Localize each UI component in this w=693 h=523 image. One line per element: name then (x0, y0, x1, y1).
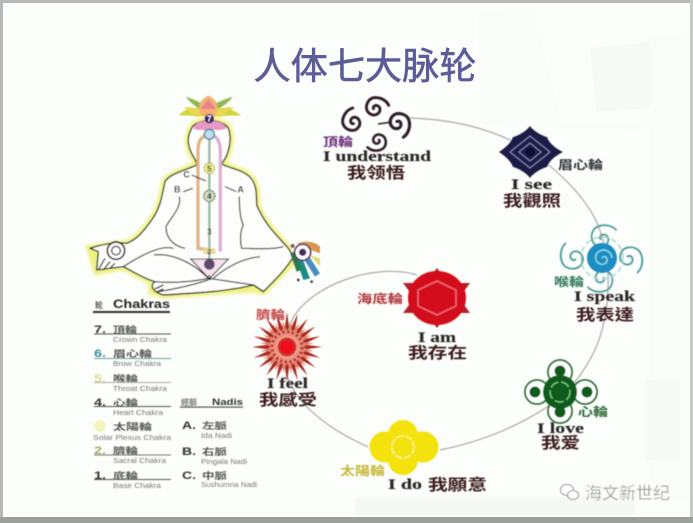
sacral affirmation (259, 376, 317, 409)
icon: root star (403, 268, 470, 328)
sacral chakra group (252, 307, 322, 409)
legend row 5 (94, 373, 171, 393)
root affirmation: I am (418, 330, 457, 346)
figure: channel letters: C (183, 169, 190, 179)
icon: sacral sunburst (252, 312, 322, 382)
nadi B: Pingala Nadi (201, 457, 247, 466)
legend row 3 (93, 420, 172, 442)
nadi C: 中脈 (202, 470, 227, 481)
figure: channels (198, 120, 220, 272)
throat label: 喉輪 (554, 274, 584, 289)
connecting spiral path (284, 118, 608, 450)
legend row 4 (94, 397, 171, 417)
figure: chakra points 7 6 5 4 3 2: 5 (207, 164, 212, 173)
crown affirmation: I understand (323, 149, 432, 165)
nadi C: C. (182, 470, 196, 482)
figure: base triangle: 1 (207, 273, 211, 282)
root affirmation (408, 330, 467, 362)
legend row 1: Base Chakra (113, 481, 162, 490)
figure: base triangle (191, 259, 228, 282)
throat chakra group (554, 225, 642, 324)
third eye affirmation: 我觀照 (503, 192, 561, 210)
crown chakra group (323, 95, 432, 182)
throat affirmation: 我表達 (576, 306, 635, 324)
icon: solar flower (370, 420, 438, 475)
legend row 4: 4. (94, 397, 106, 409)
figure: right hand with colored fingers (290, 242, 320, 283)
legend row 6: Brow Chakra (113, 359, 162, 368)
root label: 海底輪 (357, 291, 403, 306)
legend row 5: Throat Chakra (113, 384, 168, 393)
figure: chakra points 7 6 5 4 3 2: 2 (207, 247, 211, 256)
nadi C (182, 470, 257, 489)
legend row 6 (94, 348, 171, 368)
legend row 1: 1. (94, 470, 106, 482)
nadi A: 左脈 (202, 420, 227, 431)
legend row 2 (94, 445, 171, 465)
heart affirmation: 我爱 (541, 434, 580, 452)
legend row 7: 7. (94, 324, 106, 336)
figure: left hand mudra (98, 242, 125, 270)
throat affirmation: I speak (574, 289, 636, 305)
legend row 4: Heart Chakra (113, 408, 164, 417)
sacral label: 臍輪 (256, 307, 285, 322)
heart chakra group (525, 360, 608, 452)
third eye chakra group (499, 126, 603, 210)
nadis heading: 經脈 (181, 397, 197, 407)
watermark: 海文新世纪 (585, 479, 670, 504)
solar plexus chakra group (340, 420, 487, 494)
crown label: 頂輪 (323, 134, 353, 149)
legend heading (93, 299, 170, 313)
third eye affirmation (503, 177, 561, 210)
legend heading: 轮 (95, 300, 103, 310)
crown affirmation (323, 149, 432, 182)
crown affirmation: 我领悟 (347, 164, 406, 182)
solar affirmation: 我願意 (428, 475, 487, 494)
figure: chakra points 7 6 5 4 3 2: 4 (207, 192, 212, 201)
legend row 2: 2. (94, 445, 106, 457)
legend: chakras (93, 299, 172, 490)
icon: crown swirls (339, 95, 411, 151)
throat affirmation (574, 289, 636, 324)
figure: chakra points 7 6 5 4 3 2: 7 (207, 115, 212, 124)
legend row 1 (94, 470, 171, 490)
icon: throat swirls (561, 225, 642, 292)
figure: chakra points 7 6 5 4 3 2: 3 (207, 227, 212, 236)
heart affirmation: I love (537, 421, 584, 437)
third eye label: 眉心輪 (558, 157, 603, 172)
nadis heading (180, 397, 243, 408)
nadi A: A. (182, 420, 196, 432)
nadi B (182, 446, 247, 466)
figure: foot detail (155, 285, 263, 292)
heart affirmation (537, 421, 584, 452)
legend: nadis (180, 397, 257, 489)
heart label: 心輪 (578, 404, 608, 419)
legend row 1: 底輪 (113, 470, 138, 481)
legend heading: Chakras (113, 299, 170, 311)
legend row 6: 眉心輪 (113, 348, 152, 359)
figure: yellow aura (90, 121, 293, 295)
legend row 6: 6. (94, 348, 106, 360)
figure: crown lotus (179, 96, 241, 132)
sacral affirmation: 我感受 (259, 390, 317, 409)
third eye affirmation: I see (511, 177, 552, 193)
meditating figure (90, 96, 320, 295)
icon: third eye star (499, 126, 563, 178)
legend row 7: 頂輪 (113, 324, 137, 335)
root chakra group (357, 268, 470, 362)
solar affirmation (388, 475, 487, 494)
solar label: 太陽輪 (340, 463, 385, 478)
nadi C: Sushumna Nadi (201, 480, 257, 489)
nadis heading: Nadis (212, 397, 243, 408)
nadi B: B. (182, 446, 196, 458)
nadi B: 右脈 (202, 446, 227, 457)
nadi A: Ida Nadi (201, 431, 232, 440)
legend row 3: Solar Plexus Chakra (93, 433, 172, 442)
legend row 5: 喉輪 (113, 373, 138, 384)
legend row 2: 臍輪 (113, 445, 138, 456)
title: 人体七大脉轮 (254, 36, 476, 90)
legend row 4: 心輪 (113, 397, 138, 408)
icon: heart clover (525, 360, 597, 423)
figure: arm and leg creases (123, 197, 283, 292)
figure: chakra points 7 6 5 4 3 2 (203, 114, 215, 256)
sacral affirmation: I feel (267, 376, 308, 392)
nadi A (182, 420, 232, 440)
figure: channel letters: B (174, 185, 181, 195)
legend row 7: Crown Chakra (113, 335, 168, 344)
figure: channel letters: A (237, 185, 244, 195)
icon: wechat bubbles (560, 484, 578, 500)
root affirmation: 我存在 (408, 343, 467, 362)
legend row 3: 太陽輪 (113, 421, 152, 432)
legend row 7 (94, 324, 171, 344)
legend row 2: Sacral Chakra (113, 456, 167, 465)
figure: channel letters (174, 169, 244, 195)
figure: body outline (90, 121, 293, 295)
solar affirmation: I do (388, 477, 422, 493)
legend row 5: 5. (94, 373, 106, 385)
